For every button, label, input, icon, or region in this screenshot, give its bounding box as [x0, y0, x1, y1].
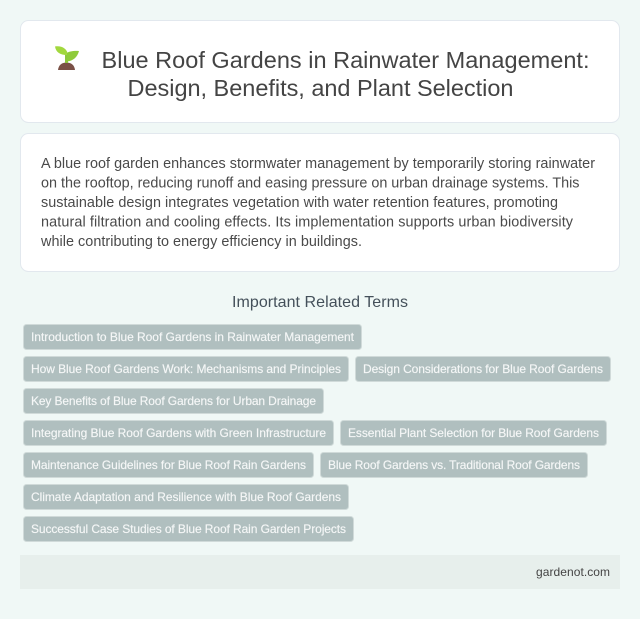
text block: description: natural filtration and cooling effects. Its implementation supports urban biodiversity: [41, 214, 574, 230]
chip: plant selection: [340, 420, 606, 446]
text block: description: on the rooftop, reducing runoff and easing pressure on urban drainage systems. This: [41, 176, 580, 192]
chip: introduction: Introduction to Blue Roof Gardens in Rainwater Management: [31, 330, 355, 344]
text block: description: [40, 156, 595, 250]
chip: maintenance: Maintenance Guidelines for Blue Roof Rain Gardens: [31, 458, 306, 472]
icon: seedling: [55, 46, 79, 70]
chip: green infrastructure: [24, 420, 334, 446]
text block: description: while contributing to energy efficiency in buildings.: [40, 234, 362, 250]
chip: green infrastructure: Integrating Blue Roof Gardens with Green Infrastructure: [31, 426, 326, 440]
title: [102, 47, 590, 101]
text block: description: A blue roof garden enhances stormwater management by temporarily storing rainwater: [41, 156, 595, 172]
chip: design considerations: Design Considerations for Blue Roof Gardens: [363, 362, 603, 376]
chips: related terms: [24, 324, 610, 542]
chip: how it works: [24, 356, 348, 382]
chip: key benefits: Key Benefits of Blue Roof Gardens for Urban Drainage: [31, 394, 316, 408]
panel: description card: [20, 134, 620, 272]
footer: site name: gardenot.com: [536, 565, 610, 579]
title: Blue Roof Gardens in Rainwater Management:: [102, 47, 590, 73]
chip: versus traditional: [320, 452, 588, 478]
chip: case studies: Successful Case Studies of Blue Roof Rain Garden Projects: [31, 522, 346, 536]
text block: description: sustainable design integrates vegetation with water retention features, promoting: [41, 195, 558, 211]
chip: how it works: How Blue Roof Gardens Work: Mechanisms and Principles: [31, 362, 341, 376]
footer bar: [20, 555, 620, 589]
chip: versus traditional: Blue Roof Gardens vs. Traditional Roof Gardens: [328, 458, 580, 472]
panel: header card: [20, 20, 620, 122]
chip: case studies: [24, 516, 354, 542]
chip: design considerations: [356, 356, 610, 382]
chip: maintenance: [24, 452, 314, 478]
chip: key benefits: [24, 388, 324, 414]
heading: related terms: Important Related Terms: [232, 294, 408, 311]
chip: introduction: [24, 324, 362, 350]
chip: climate adaptation: [24, 484, 348, 510]
chip: climate adaptation: Climate Adaptation and Resilience with Blue Roof Gardens: [31, 490, 341, 504]
chip: plant selection: Essential Plant Selection for Blue Roof Gardens: [348, 426, 599, 440]
title: Design, Benefits, and Plant Selection: [128, 75, 514, 101]
